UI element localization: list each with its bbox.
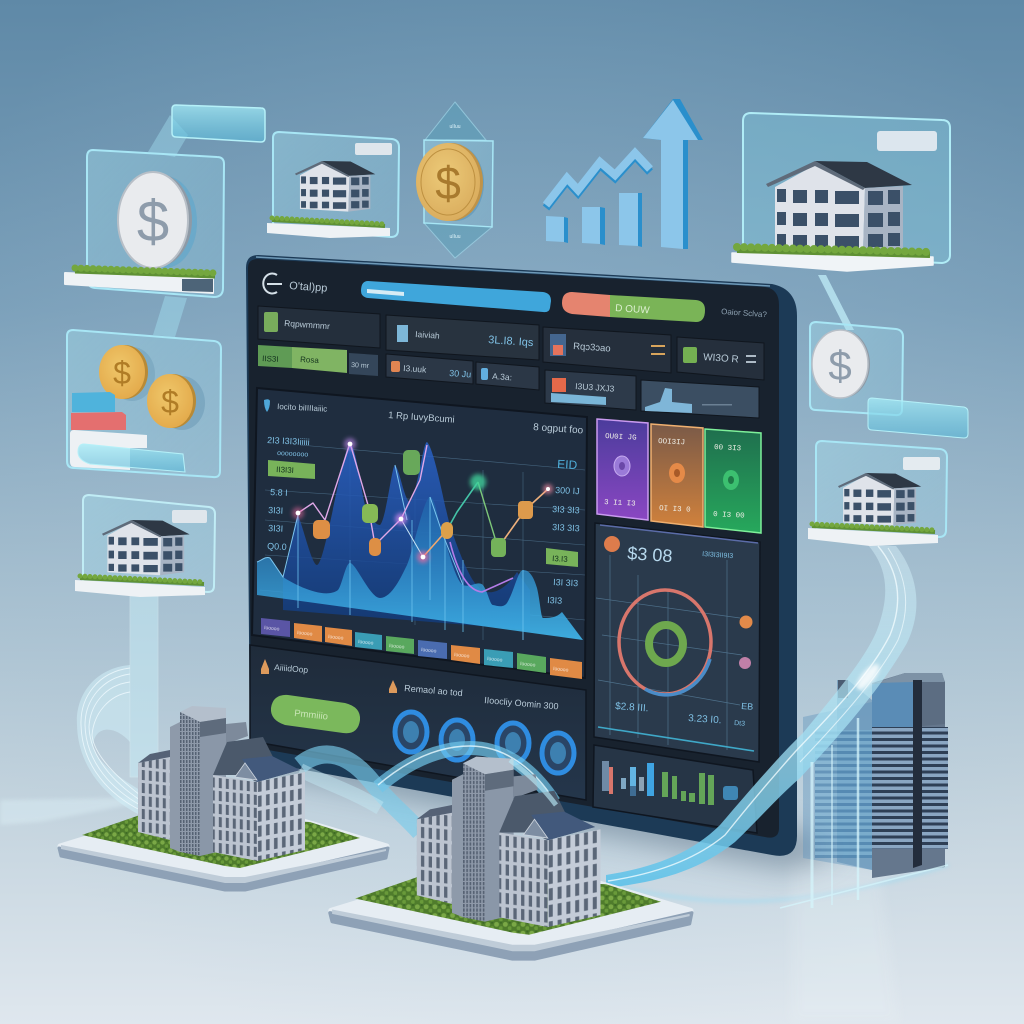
legend tiles: Iooooo (454, 652, 470, 660)
building group one (59, 706, 388, 890)
gauge labels: Dt3 (734, 720, 745, 728)
tile: I3.uuk (403, 363, 427, 375)
glass tower (803, 680, 872, 870)
card: house small top (267, 132, 399, 238)
tile (545, 370, 636, 410)
tile (641, 380, 759, 418)
gauge labels (615, 701, 754, 728)
tile: WI3O R (703, 352, 739, 365)
panel heading: Remaol ao tod (404, 683, 463, 698)
chart labels right: 3I3 3I3 (552, 522, 580, 533)
gauge value: $3 08 (627, 543, 673, 566)
ribbon over building (510, 760, 556, 805)
connector top left (148, 115, 188, 157)
chart labels left: II3I3I (276, 465, 294, 475)
area chart (257, 442, 583, 640)
chart labels right: I3I 3I3 (553, 577, 578, 588)
chart labels left: 2I3 I3I3Iiiiii (267, 435, 310, 447)
legend tiles: Iooooo (520, 661, 536, 669)
chart headings: 8 ogput foo (533, 422, 584, 437)
green card (705, 429, 761, 533)
app name: O'tal)pp (289, 280, 328, 295)
card: gold coins left (67, 330, 221, 477)
zigzag (546, 156, 650, 208)
legend tiles: Iooooo (421, 647, 437, 655)
chart headings: Iocito biIIIIaiiic (277, 402, 328, 414)
bars (546, 193, 642, 247)
building group two (330, 757, 692, 959)
grid lines (260, 445, 585, 640)
ring buttons (395, 712, 574, 773)
legend tiles: Iooooo (328, 634, 344, 642)
legend tiles: Iooooo (553, 666, 569, 674)
panel heading (261, 659, 559, 711)
ribbon right (606, 545, 916, 888)
status pill: D OUW (615, 303, 650, 316)
tile (543, 327, 671, 373)
search pill (361, 281, 551, 312)
gauge labels: 3.23 I0. (688, 713, 722, 726)
monitor shadow (280, 740, 840, 870)
orange card (651, 424, 703, 527)
green status tile: Rosa (300, 355, 320, 365)
monitor face (248, 259, 779, 838)
green card: 0 I3 00 (713, 511, 745, 521)
card: house right (808, 441, 947, 546)
logo mark (263, 274, 282, 294)
status pill (562, 292, 705, 322)
gauge icon (604, 536, 620, 552)
connector lower left (153, 296, 187, 337)
coins: $ (113, 355, 131, 391)
chart labels left: 5.8 I (270, 487, 288, 498)
legend tiles: Iooooo (389, 643, 405, 651)
green status tile: IIS3I (262, 354, 279, 364)
coin (416, 143, 484, 221)
tile: Iaiviah (415, 329, 440, 341)
header bar (263, 274, 768, 322)
gauge labels: $2.8 III. (615, 701, 649, 714)
green card: 00 3I3 (714, 444, 742, 453)
card: coin right: $ (828, 342, 852, 389)
tile: A.3a: (492, 371, 512, 382)
gauge panel (594, 523, 760, 762)
gauge grid (596, 555, 742, 750)
chart labels right: 300 IJ (555, 485, 580, 496)
blocks (70, 392, 185, 472)
legend tiles (261, 618, 582, 679)
orange card: OI I3 0 (659, 505, 691, 515)
chart labels left: Q0.0 (267, 541, 287, 552)
panel heading: AiiiidOop (274, 662, 309, 675)
chart labels right: I3I3 (547, 595, 562, 606)
main block (872, 673, 948, 878)
arrow (643, 99, 703, 150)
tower right (803, 673, 948, 878)
gauge caption: I3I3I3II9I3 (702, 551, 734, 560)
chart labels right: 3I3 3I3 (552, 504, 580, 515)
glowing points (292, 438, 553, 563)
chart labels right (546, 457, 580, 606)
dashboard monitor (246, 255, 797, 856)
chart panel (252, 388, 587, 679)
coin (118, 172, 197, 268)
bars (602, 761, 738, 805)
purple card: 3 I1 I3 (604, 499, 636, 509)
glass column left (130, 596, 158, 777)
chart headings (264, 399, 584, 437)
tile: Rqɔ3ɔao (573, 341, 611, 355)
action pill: Pmmiiio (294, 708, 328, 723)
coin: $ (137, 189, 169, 254)
card: gold coin diamond: uIIuu (449, 234, 461, 240)
chart labels right: I3.I3 (552, 554, 568, 564)
purple card: OU0I JG (605, 433, 637, 443)
growth arrow chart (546, 99, 703, 249)
chart labels left: oooooooo (277, 450, 308, 459)
stat cards (597, 419, 761, 533)
panel heading: IIoocliy Oomin 300 (484, 695, 559, 711)
ribbon left swirl (77, 665, 140, 815)
chart labels right: EID (557, 457, 578, 472)
tile row (258, 306, 764, 418)
green status tile: 30 mr (351, 362, 370, 370)
card: house left (75, 495, 215, 597)
trend line (298, 443, 548, 592)
legend tiles: Iooooo (487, 656, 503, 664)
ribbon middle (300, 746, 554, 832)
coins (99, 345, 205, 430)
floor glow lines (0, 797, 948, 1024)
tile (677, 337, 764, 380)
chart labels left: 3I3I (268, 505, 283, 516)
gauge dots (739, 616, 752, 669)
action pill (271, 695, 360, 733)
purple card (597, 419, 648, 520)
monitor bezel (246, 255, 797, 856)
card: gold coin diamond: uIIuu (449, 124, 461, 130)
card: silver coin (65, 150, 224, 297)
coin: $ (435, 157, 461, 209)
chart markers (313, 450, 533, 557)
green status tile (258, 345, 378, 376)
card: big house (732, 113, 950, 271)
card: coin right (810, 322, 968, 438)
connector glass tube top (172, 105, 265, 142)
tile: 3L.I8. Iqs (488, 334, 534, 349)
orange card: OOI3IJ (658, 438, 685, 447)
bottom control panel (250, 645, 586, 800)
tile (258, 306, 380, 348)
header caption: Oaior Sclva? (721, 307, 768, 319)
gauge labels: EB (741, 701, 754, 712)
tile (386, 354, 473, 384)
chart labels left (267, 435, 315, 552)
glass columns right (780, 718, 948, 908)
tile (476, 362, 539, 390)
tile: Rqpwmmmr (284, 318, 330, 331)
card: gold coin diamond (416, 102, 493, 258)
tile (386, 315, 539, 360)
legend tiles: Iooooo (264, 625, 280, 633)
legend tiles: Iooooo (358, 639, 374, 647)
connector right (818, 275, 854, 330)
chart labels left: 3I3I (268, 523, 283, 534)
shelf (65, 268, 215, 293)
coins: $ (161, 384, 179, 420)
legend tiles: Iooooo (297, 630, 313, 638)
tile: 30 Ju (449, 368, 472, 380)
tile: I3U3 JXJ3 (575, 381, 615, 394)
bar chart panel (593, 745, 757, 833)
ring gauge (619, 590, 711, 695)
chart headings: 1 Rp IuvyBcumi (388, 410, 455, 426)
